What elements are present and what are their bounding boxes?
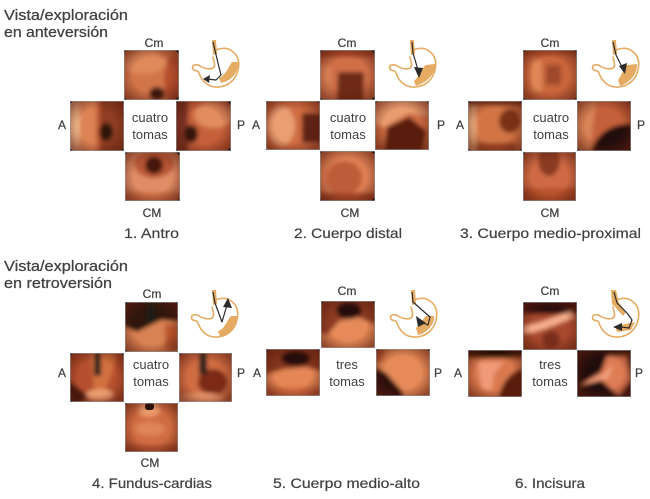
- center text: tomas: [532, 374, 568, 389]
- center text: cuatro: [533, 110, 569, 125]
- orientation labels: Cm: [338, 36, 356, 50]
- center text: tomas: [330, 127, 366, 142]
- section heading: anteversion: en anteversión: [4, 24, 108, 41]
- orientation labels: P: [437, 118, 445, 132]
- orientation labels: [456, 36, 645, 220]
- icon: stomach with scope, incisura: [592, 290, 639, 337]
- center text: tomas: [533, 127, 569, 142]
- orientation labels: P: [637, 118, 645, 132]
- section heading: retroversion: [4, 258, 128, 292]
- caption: 5. Cuerpo medio-alto: [273, 475, 420, 491]
- orientation labels: Cm: [143, 287, 161, 301]
- endoscopy cross: cuerpo medio-proximal: [468, 50, 631, 201]
- orientation labels: CM: [541, 206, 559, 220]
- icon: stomach with scope, cuerpo medio-proximal: [592, 40, 639, 87]
- center text: cuatro: [133, 357, 169, 372]
- orientation labels: Cm: [541, 36, 559, 50]
- orientation labels: A: [253, 366, 261, 380]
- orientation labels: [454, 284, 643, 380]
- orientation labels: A: [454, 366, 462, 380]
- endoscopy tiles: incisura: [468, 302, 631, 397]
- panel: 1. Antro: [58, 36, 245, 241]
- section heading: anteversion: [4, 7, 128, 41]
- icon: stomach with scope, cuerpo distal: [390, 40, 436, 87]
- endoscopy cross: antro: [70, 50, 231, 201]
- caption: 4. Fundus-cardias: [92, 475, 212, 491]
- orientation labels: [252, 36, 445, 220]
- orientation labels: A: [58, 118, 66, 132]
- orientation labels: A: [58, 366, 66, 380]
- center text: [124, 101, 176, 151]
- panel: 6. Incisura: [454, 284, 643, 491]
- section heading: anteversion: Vista/exploración: [4, 7, 128, 24]
- caption: 3. Cuerpo medio-proximal: [460, 225, 641, 241]
- icon: stomach with scope, antro: [192, 40, 239, 87]
- endoscopy cross: fundus-cardias: [70, 302, 232, 452]
- icon: stomach with scope, fundus-cardias: [192, 290, 238, 337]
- caption: 6. Incisura: [515, 475, 585, 491]
- panel: 3. Cuerpo medio-proximal: [456, 36, 645, 241]
- orientation labels: [58, 287, 245, 470]
- center text: tomas: [329, 374, 365, 389]
- caption: 1. Antro: [124, 225, 179, 241]
- orientation labels: [58, 36, 245, 220]
- center text: [523, 101, 577, 151]
- orientation labels: CM: [143, 206, 161, 220]
- center text: tres: [336, 357, 358, 372]
- center text: [321, 349, 376, 396]
- center text: cuatro: [330, 110, 366, 125]
- orientation labels: [253, 284, 442, 380]
- orientation labels: P: [434, 366, 442, 380]
- endoscopy tiles: cuerpo medio-alto: [266, 301, 430, 396]
- orientation labels: CM: [141, 456, 159, 470]
- orientation labels: Cm: [338, 284, 356, 298]
- endoscopy cross: cuerpo distal: [266, 50, 429, 201]
- center text: [320, 101, 375, 151]
- orientation labels: Cm: [145, 36, 163, 50]
- orientation labels: P: [237, 366, 245, 380]
- center text: [125, 353, 179, 403]
- center text: tomas: [132, 127, 168, 142]
- orientation labels: P: [635, 366, 643, 380]
- section heading: retroversion: en retroversión: [4, 275, 112, 292]
- caption: 2. Cuerpo distal: [294, 225, 402, 241]
- orientation labels: A: [456, 118, 464, 132]
- panel: 5. Cuerpo medio-alto: [253, 284, 442, 491]
- panel: 2. Cuerpo distal: [252, 36, 445, 241]
- section heading: retroversion: Vista/exploración: [4, 258, 128, 275]
- orientation labels: P: [237, 118, 245, 132]
- orientation labels: A: [252, 118, 260, 132]
- center text: tres: [539, 357, 561, 372]
- icon: stomach with scope, cuerpo medio-alto: [390, 290, 437, 337]
- panel: 4. Fundus-cardias: [58, 287, 245, 491]
- orientation labels: CM: [341, 206, 359, 220]
- center text: tomas: [133, 374, 169, 389]
- center text: [523, 350, 577, 397]
- orientation labels: Cm: [541, 284, 559, 298]
- center text: cuatro: [132, 110, 168, 125]
